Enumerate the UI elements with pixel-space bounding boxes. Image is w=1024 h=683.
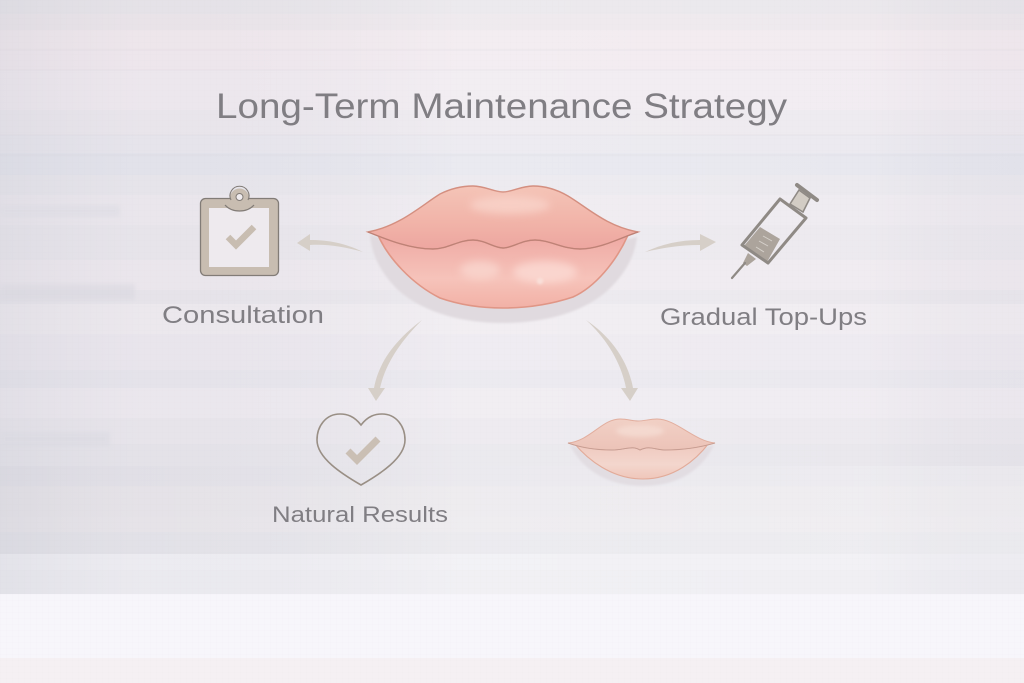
small lower lip — [574, 443, 709, 479]
arrow: to consultation — [297, 234, 363, 252]
icon: heart with check — [317, 414, 405, 485]
label: consultation: Consultation — [162, 302, 324, 329]
arrow: to natural results — [368, 320, 422, 401]
upper lip — [368, 186, 638, 249]
lower lip — [378, 235, 628, 308]
small mouth line — [568, 443, 715, 450]
lips soft shadow — [370, 235, 637, 323]
mouth line — [368, 232, 638, 249]
title: Long-Term Maintenance Strategy — [216, 87, 788, 126]
label: gradual top-ups: Gradual Top-Ups — [660, 304, 867, 331]
small upper lip — [568, 419, 715, 450]
lower lip glint — [537, 278, 543, 284]
label: natural results: Natural Results — [272, 502, 448, 527]
lower lip highlights — [460, 261, 577, 283]
main lips illustration — [368, 186, 638, 323]
small lips highlight — [616, 425, 664, 437]
arrow: to gradual top-ups — [645, 234, 716, 252]
icon: syringe — [732, 185, 817, 278]
small lips illustration — [568, 419, 715, 486]
small lips shadow — [570, 445, 714, 486]
upper lip highlight — [470, 196, 550, 214]
arrow: to subtle lips result — [586, 320, 638, 401]
icon: clipboard with check — [200, 186, 278, 276]
